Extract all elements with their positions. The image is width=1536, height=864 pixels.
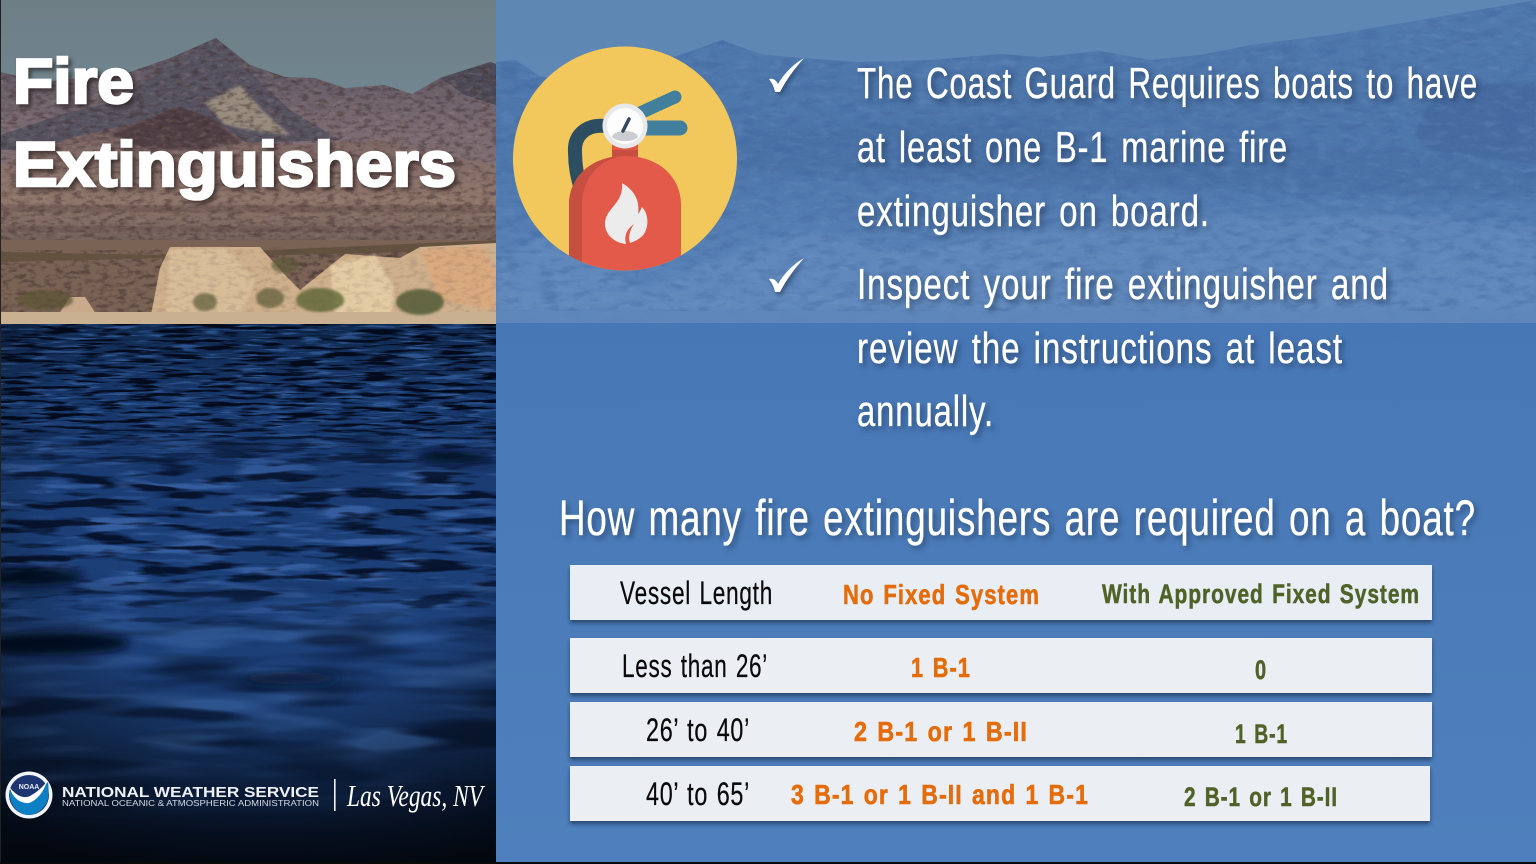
icon: fire extinguisher (513, 46, 737, 275)
text: office: Las Vegas, NV (346, 778, 485, 813)
text block: bullet 1 (857, 59, 1478, 236)
text block: bullet 2: review the instructions at least (857, 324, 1343, 373)
title: Extinguishers (13, 130, 456, 200)
neck (612, 144, 638, 150)
title: Fire (13, 47, 134, 117)
row: less than 26: 1 B-1 (911, 652, 971, 683)
text block: bullet 2: annually. (857, 387, 994, 436)
row: 26 to 40: 1 B-1 (1235, 719, 1288, 749)
title (13, 47, 456, 200)
logo: NOAA National Weather Service (6, 772, 485, 818)
body (569, 156, 681, 275)
row: 40 to 65: 3 B-1 or 1 B-II and 1 B-1 (791, 779, 1089, 810)
row: 26 to 40: 2 B-1 or 1 B-II (854, 716, 1028, 747)
row: header: With Approved Fixed System (1102, 579, 1420, 609)
row: header (570, 565, 1432, 620)
sky (1, 0, 496, 94)
row: 40 to 65: 40’ to 65’ (646, 776, 750, 812)
icon: check 2 (769, 258, 804, 292)
row: 26 to 40 (570, 702, 1432, 757)
panel: left photo (0, 0, 496, 864)
text block: bullet 1: extinguisher on board. (857, 187, 1210, 236)
icon: NOAA emblem: NOAA (19, 784, 39, 791)
table (570, 565, 1432, 821)
row: less than 26 (570, 638, 1432, 693)
hose (575, 126, 606, 192)
row: header: Vessel Length (620, 575, 773, 611)
water (0, 324, 496, 864)
row: 40 to 65 (570, 766, 1430, 821)
icon: NOAA emblem (6, 772, 52, 818)
row: 40 to 65: 2 B-1 or 1 B-II (1184, 782, 1338, 812)
handles (640, 97, 675, 113)
icon: check 1 (769, 58, 804, 92)
panel: right background (496, 0, 1536, 864)
logo: NOAA National Weather Service: NATIONAL OCEANIC & ATMOSPHERIC ADMINISTRATION (62, 798, 319, 808)
text block: bullet 2 (857, 260, 1389, 436)
mountains (1, 38, 496, 240)
row: header: No Fixed System (843, 579, 1040, 610)
text block: bullet 1: at least one B-1 marine fire (857, 123, 1288, 172)
row: less than 26: Less than 26’ (622, 648, 768, 684)
text: agency name: NATIONAL WEATHER SERVICE (62, 784, 319, 801)
row: less than 26: 0 (1255, 655, 1267, 685)
gauge (602, 104, 648, 148)
flame (605, 183, 647, 244)
shore and cliffs (0, 240, 496, 324)
row: 26 to 40: 26’ to 40’ (646, 712, 750, 748)
